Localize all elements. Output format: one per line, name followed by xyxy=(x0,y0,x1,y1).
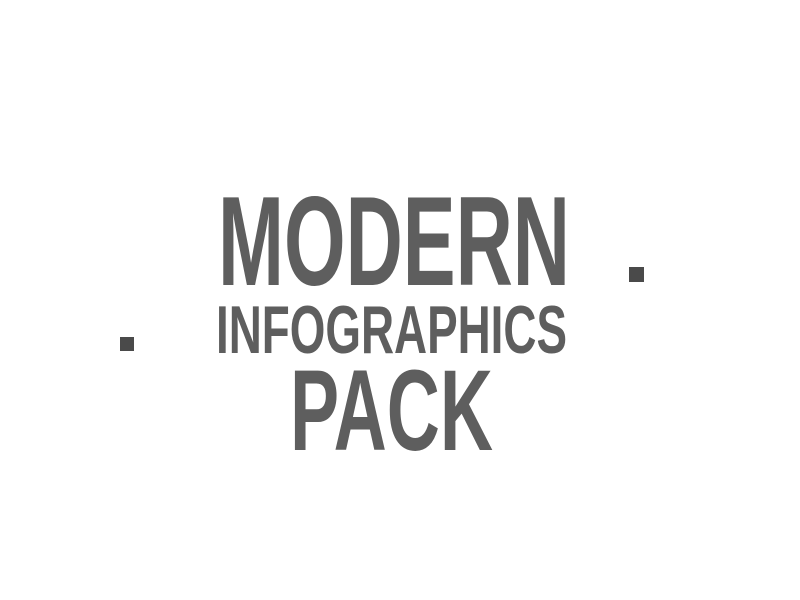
title: PACK: PACK xyxy=(290,347,493,475)
title: MODERN: MODERN xyxy=(218,170,570,312)
decorative square right xyxy=(629,267,644,282)
subtitle: INFOGRAPHICS: INFOGRAPHICS xyxy=(216,292,567,368)
decorative square left xyxy=(120,337,134,351)
